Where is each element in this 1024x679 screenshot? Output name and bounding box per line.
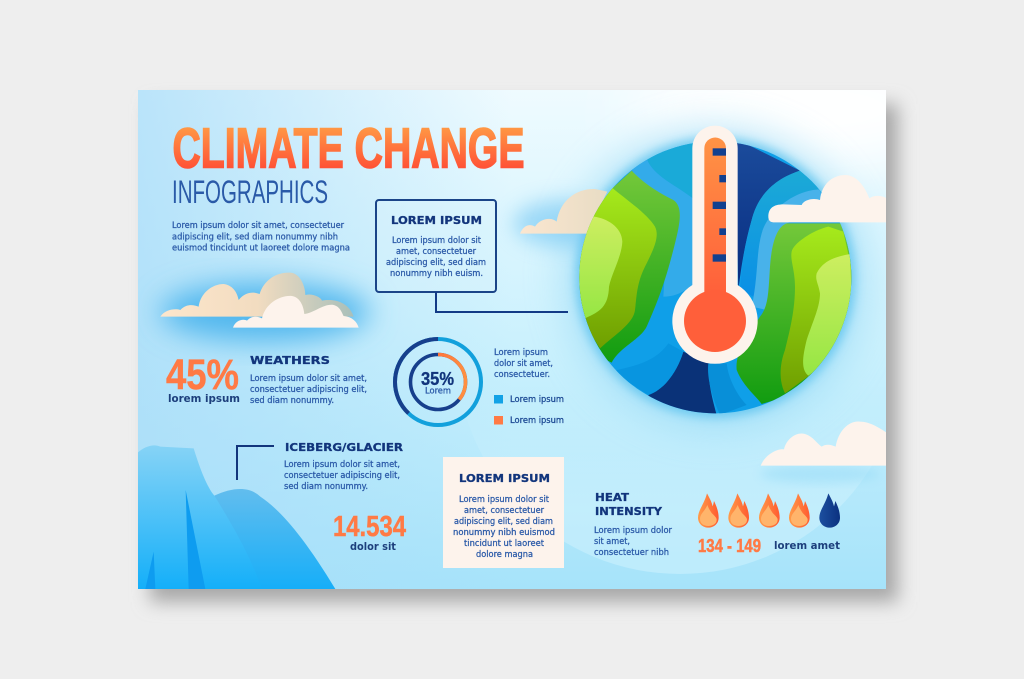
- arrow: connector line to globe: [436, 292, 568, 312]
- text block: weathers: sed diam nonummy.: [250, 396, 334, 406]
- text block: heat intensity: [594, 491, 672, 558]
- chart: donut 35 percent: Lorem: [425, 386, 451, 396]
- intro text block: [172, 221, 350, 254]
- illustration: cloud behind globe: [513, 189, 613, 247]
- thermometer: [672, 126, 758, 364]
- legend: [494, 395, 564, 426]
- chart: donut 35 percent: 35%: [421, 369, 454, 389]
- callout: cream lorem ipsum box: LOREM IPSUM: [459, 472, 550, 485]
- panel: infographic background: [138, 90, 886, 589]
- intro text block: euismod tincidunt ut laoreet dolore magna: [172, 244, 350, 254]
- text block: heat intensity: consectetuer nibh: [594, 548, 669, 558]
- callout: cream lorem ipsum box: [443, 457, 564, 568]
- callout: outlined lorem ipsum box: [376, 200, 496, 292]
- label: lorem amet: lorem amet: [774, 540, 840, 552]
- panel shadow: [150, 104, 898, 602]
- stat: 14.534: dolor sit: [350, 541, 396, 553]
- bracket: iceberg connector: [237, 446, 274, 480]
- text block: weathers: Lorem ipsum dolor sit amet,: [250, 374, 367, 384]
- text block: donut description: [494, 348, 553, 380]
- title: CLIMATE CHANGE: [172, 116, 524, 180]
- text block: iceberg glacier: ICEBERG/GLACIER: [285, 441, 404, 454]
- illustration: globe glow: [566, 128, 866, 428]
- illustration: globe with thermometer: [570, 126, 853, 415]
- callout: outlined lorem ipsum box: LOREM IPSUM: [391, 214, 482, 227]
- intro text block: Lorem ipsum dolor sit amet, consectetuer: [172, 221, 344, 231]
- chart: donut 35 percent: [395, 339, 481, 425]
- text block: iceberg glacier: consectetuer adipiscing elit,: [284, 471, 400, 481]
- text block: weathers: consectetuer adipiscing elit,: [250, 385, 367, 395]
- illustration: clouds upper left: [160, 273, 359, 328]
- stat: heat range: 134 - 149: [698, 535, 761, 556]
- callout: outlined lorem ipsum box: Lorem ipsum dolor sit: [392, 236, 481, 246]
- text block: weathers: WEATHERS: [250, 354, 330, 367]
- callout: cream lorem ipsum box: Lorem ipsum dolor sit: [459, 495, 549, 505]
- stat: 45 percent: lorem ipsum: [168, 393, 240, 405]
- text block: donut description: Lorem ipsum: [494, 348, 548, 358]
- icons: heat flames and water drop: [698, 493, 840, 528]
- illustration: iceberg glacier: [137, 445, 335, 589]
- stat: 14.534: [333, 511, 406, 553]
- text block: donut description: dolor sit amet,: [494, 359, 553, 369]
- stat: 45 percent: 45%: [166, 351, 239, 399]
- text block: heat intensity: Lorem ipsum dolor: [594, 526, 672, 536]
- callout: cream lorem ipsum box: adipiscing elit, sed diam: [454, 517, 553, 527]
- text block: donut description: consectetuer.: [494, 370, 550, 380]
- illustration: cloud upper right: [768, 175, 887, 222]
- legend: Lorem ipsum: [510, 416, 564, 426]
- callout: cream lorem ipsum box: dolore magna: [476, 550, 533, 560]
- callout: cream lorem ipsum box: amet, consectetuer: [464, 506, 544, 516]
- callout: outlined lorem ipsum box: nonummy nibh euism.: [390, 269, 483, 279]
- text block: weathers: [250, 354, 367, 406]
- intro text block: adipiscing elit, sed diam nonummy nibh: [172, 232, 338, 242]
- text block: heat intensity: INTENSITY: [595, 505, 663, 518]
- text block: iceberg glacier: sed diam nonummy.: [284, 482, 368, 492]
- callout: outlined lorem ipsum box: adipiscing elit, sed diam: [386, 258, 486, 268]
- text block: iceberg glacier: Lorem ipsum dolor sit amet,: [284, 460, 400, 470]
- callout: cream lorem ipsum box: tincidunt ut laoreet: [464, 539, 544, 549]
- stat: 14.534: 14.534: [333, 511, 406, 543]
- callout: outlined lorem ipsum box: amet, consectetuer: [396, 247, 476, 257]
- illustration: cloud lower right: [761, 421, 887, 466]
- text block: heat intensity: HEAT: [595, 491, 630, 504]
- subtitle: INFOGRAPHICS: [172, 174, 328, 210]
- text block: heat intensity: sit amet,: [594, 537, 630, 547]
- legend: Lorem ipsum: [510, 395, 564, 405]
- text block: iceberg glacier: [284, 441, 404, 492]
- callout: cream lorem ipsum box: nonummy nibh euismod: [453, 528, 555, 538]
